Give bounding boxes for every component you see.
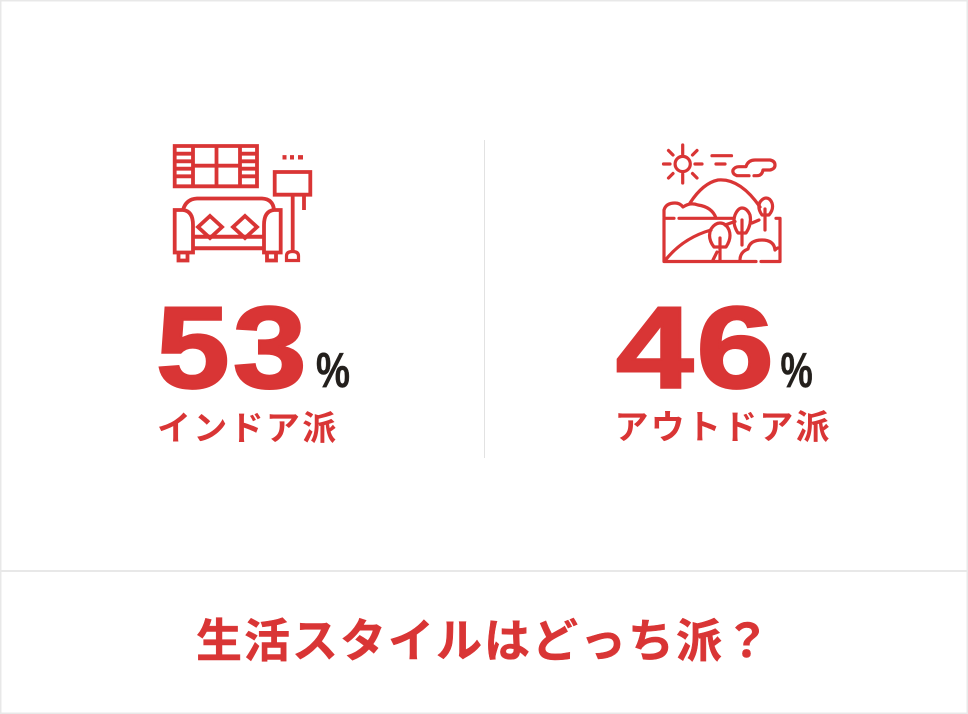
label: indoor: インドア派 xyxy=(157,410,338,448)
icon: sofa, window and floor lamp xyxy=(175,146,310,260)
label: outdoor: アウトドア派 xyxy=(614,409,832,447)
title: 生活スタイルはどっち派？ xyxy=(196,615,772,667)
value: 46%: 46 xyxy=(616,283,774,413)
value: 53%: % xyxy=(316,344,350,398)
panel: outdoor xyxy=(614,145,832,447)
icon: landscape with sun, hill and trees xyxy=(664,145,780,262)
value: 53%: 53 xyxy=(156,283,306,413)
panel: indoor xyxy=(156,146,350,448)
value: 46%: % xyxy=(780,344,813,398)
